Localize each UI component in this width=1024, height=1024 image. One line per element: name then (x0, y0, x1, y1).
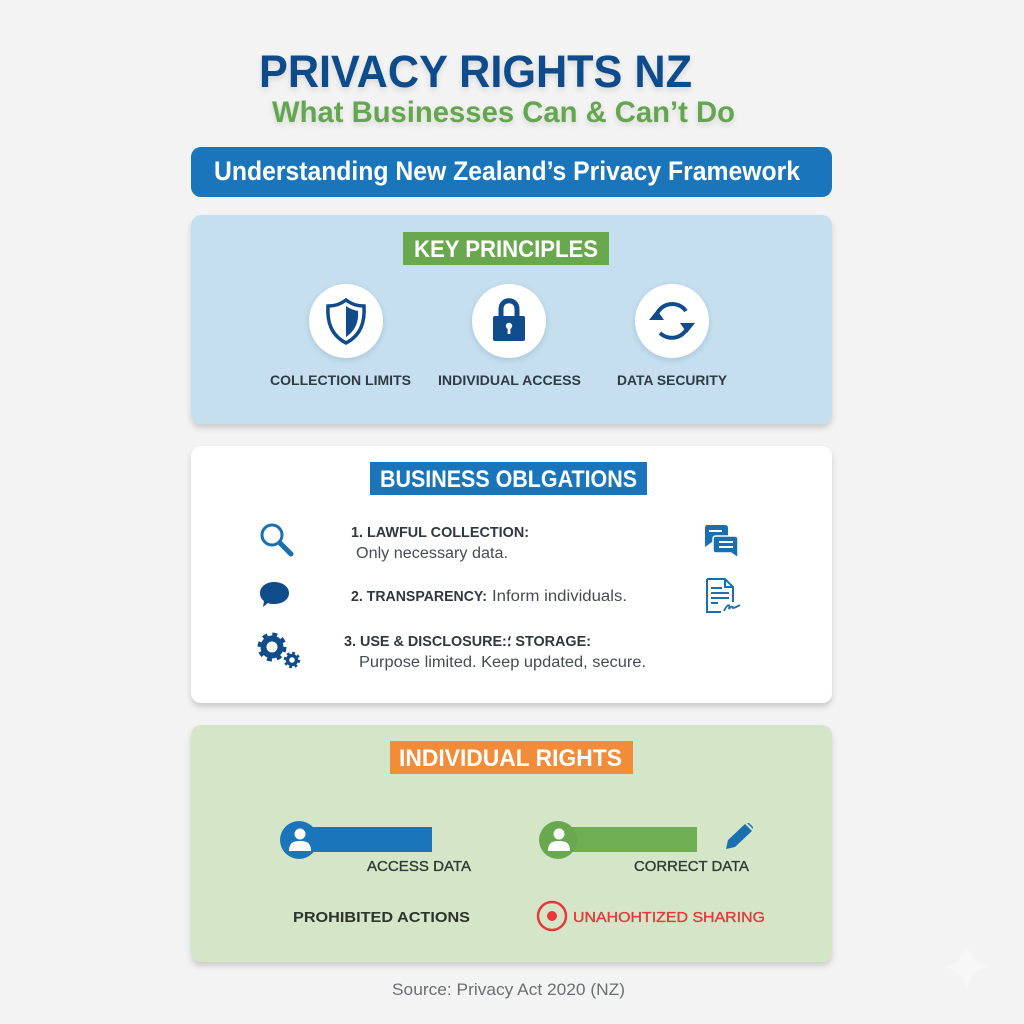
correct data bar (539, 821, 697, 859)
item 2 (351, 588, 627, 605)
item 1 heading: 1. LAWFUL COLLECTION: (351, 524, 529, 541)
label: collection limits: COLLECTION LIMITS (270, 372, 411, 388)
icon: sparkle watermark (944, 944, 990, 990)
icon: sync arrows (635, 284, 709, 358)
title: PRIVACY RIGHTS NZ (259, 46, 692, 97)
label: access data: ACCESS DATA (367, 859, 471, 875)
icon: gears (260, 634, 299, 667)
item 2: Inform individuals. (492, 588, 627, 605)
source note: Source: Privacy Act 2020 (NZ) (392, 980, 625, 999)
icon: chat bubbles (705, 525, 738, 558)
subtitle: What Businesses Can & Can’t Do (272, 96, 735, 129)
item 2: 2. TRANSPARENCY: (351, 588, 487, 605)
label: data security: DATA SECURITY (617, 372, 728, 388)
icon: red target (538, 902, 566, 930)
label: unauthorized sharing: UNAHOHTIZED SHARING (573, 909, 765, 926)
panel: individual rights (191, 725, 832, 962)
label: prohibited actions: PROHIBITED ACTIONS (293, 909, 470, 926)
icon: signed document (707, 579, 740, 612)
item 3 text: Purpose limited. Keep updated, secure. (359, 654, 646, 671)
item 1 text: Only necessary data. (356, 545, 508, 562)
label: correct data: CORRECT DATA (634, 859, 749, 875)
icon: speech bubble (260, 582, 289, 607)
label: individual access: INDIVIDUAL ACCESS (438, 372, 581, 388)
heading: key principles: KEY PRINCIPLES (414, 236, 598, 263)
heading: business obligations: BUSINESS OBLGATIONS (380, 466, 637, 493)
panel: business obligations (191, 446, 832, 703)
panel: key principles (191, 215, 832, 424)
icon: magnifier (262, 525, 291, 554)
banner text: Understanding New Zealand’s Privacy Framework (214, 156, 801, 186)
icon: shield (309, 284, 383, 358)
heading: individual rights: INDIVIDUAL RIGHTS (399, 745, 622, 772)
icon: pen (726, 823, 753, 849)
icon: lock (472, 284, 546, 358)
access data bar (280, 821, 432, 859)
banner (191, 147, 832, 197)
item 3 heading: 3. USE & DISCLOSURE:؛ STORAGE: (344, 633, 591, 650)
